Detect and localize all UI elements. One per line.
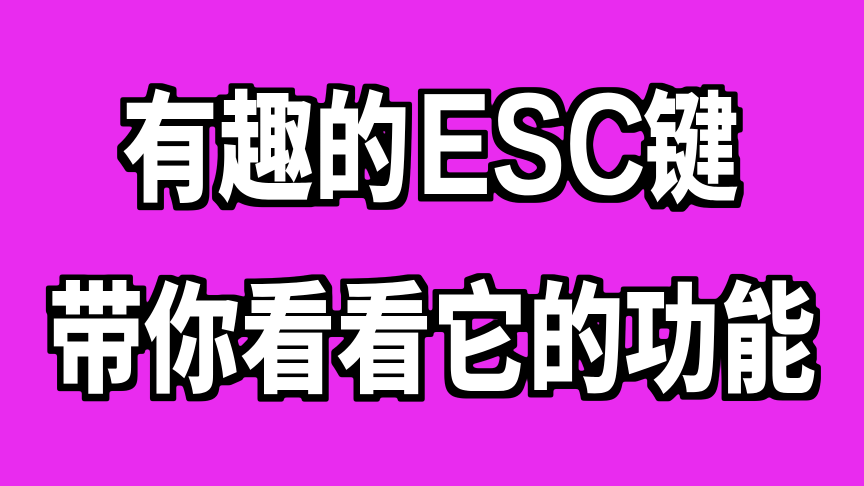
title line 2: 带你看看它的功能 bbox=[48, 275, 816, 408]
title line 1 bbox=[122, 63, 739, 226]
title line 1: ESC bbox=[417, 63, 646, 226]
title line 1: 键 bbox=[643, 84, 739, 217]
title line 1: 有趣的 bbox=[122, 84, 410, 217]
